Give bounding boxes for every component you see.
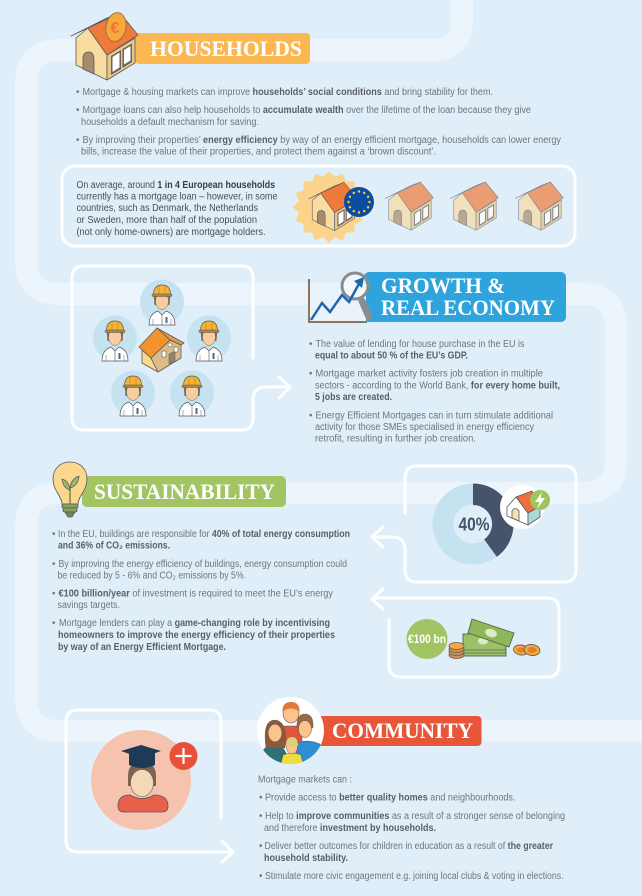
text block: community bullets: Help to improve communities as a result of a stronger sense of belonging [265,811,565,822]
text block: households bullets: • [76,135,80,146]
arrow: education panel to text [222,841,233,862]
icon: plus badge [170,742,198,770]
text block: households bullets: bills, increase the value of their properties, and protect them against a ‘brown discount’. [81,146,436,158]
text block: European mortgage share [76,180,278,238]
text block: European mortgage share: or Sweden, more than half of the population [76,215,257,226]
arrow: 40 percent panel to text [372,527,383,547]
heading: community: COMMUNITY [332,718,473,743]
text block: sustainability bullets [52,529,350,653]
icon: highlighted house with EU flag [293,171,374,243]
text block: growth bullets: The value of lending for house purchase in the EU is [316,339,525,350]
text block: community bullets: • [259,841,263,852]
icon: banknotes [463,619,514,656]
text block: growth bullets: 5 jobs are created. [315,392,392,403]
chart: donut 40 percent: 40% [458,514,490,534]
text block: community bullets: • [259,871,263,882]
text block: European mortgage share: currently has a mortgage loan – however, in some [76,192,278,202]
panel: 40 percent energy [372,466,576,582]
text block: community bullets: Provide access to better quality homes and neighbourhoods. [265,792,516,804]
icon: graduate [91,730,191,830]
text block: community bullets: • [259,811,263,822]
text block: growth bullets: Mortgage market activity fosters job creation in multiple [316,368,544,380]
chart: donut 40 percent [443,483,514,557]
text block: community bullets [258,774,565,882]
text block: sustainability bullets: By improving the energy efficiency of buildings, energy consumption could [58,559,347,570]
text block: sustainability bullets: be reduced by 5 - 6% and CO₂ emissions by 5%. [58,570,246,582]
text block: households bullets: By improving their properties’ energy efficiency by way of an energy efficient mortgage, households can lower energy [82,135,561,146]
text block: community bullets: Mortgage markets can : [258,774,352,786]
icon: light bulb with sprout [53,462,87,517]
text block: sustainability bullets: In the EU, buildings are responsible for 40% of total energy consumption [58,529,350,540]
callout: 100 bn [406,619,448,659]
text block: sustainability bullets: €100 billion/year of investment is required to meet the EU’s energy [58,588,333,600]
panel: workers around a house [72,266,290,430]
icon: house with euro coin: € [110,20,120,37]
icon: efficient house with energy badge [500,485,550,529]
text block: households bullets: Mortgage loans can also help households to accumulate wealth over the lifetime of the loan because they give [82,105,532,116]
heading: sustainability: SUSTAINABILITY [94,479,275,504]
text block: growth bullets: equal to about 50 % of the EU’s GDP. [315,350,468,362]
icon: central house [139,328,184,372]
text block: households bullets: households a default mechanism for saving. [81,117,259,128]
text block: community bullets: household stability. [264,853,348,864]
text block: community bullets: Stimulate more civic engagement e.g. joining local clubs & voting in elections. [265,871,564,882]
text block: European mortgage share: (not only home-owners) are mortgage holders. [76,227,266,238]
panel: 1 in 4 households [62,166,575,246]
text block: households bullets: • [76,105,80,116]
arrow: growth panel to text [279,377,290,398]
text block: community bullets: Deliver better outcomes for children in education as a result of the greater [264,841,553,852]
icon: family [256,697,324,768]
text block: community bullets: and therefore investment by households. [264,823,436,834]
icon: coin stack [449,642,464,658]
icon: worker left [93,316,137,361]
heading: households: HOUSEHOLDS [150,36,302,61]
panel: education [66,710,233,862]
text block: growth bullets: retrofit, resulting in further job creation. [315,434,476,444]
icon: house with euro coin [71,11,138,80]
text block: growth bullets [309,339,560,444]
text block: European mortgage share: countries, such as Denmark, the Netherlands [76,203,258,214]
text block: sustainability bullets: • [52,559,56,570]
text block: sustainability bullets: Mortgage lenders can play a game-changing role by incentivising [59,618,330,629]
panel: 100 billion investment [372,589,559,677]
icon: worker right [187,316,231,361]
callout: 100 bn: €100 bn [408,634,446,646]
text block: households bullets [76,87,561,158]
text block: European mortgage share: On average, around 1 in 4 European households [76,180,275,191]
heading: growth and real economy [364,272,566,322]
text block: growth bullets: sectors - according to the World Bank, for every home built, [315,380,560,392]
icon: loose coins [513,643,541,657]
text block: sustainability bullets: • [52,618,56,629]
text block: sustainability bullets: and 36% of CO₂ emissions. [58,540,170,552]
text block: growth bullets: • [309,368,313,380]
text block: growth bullets: activity for those SMEs specialised in energy efficiency [315,422,534,433]
text block: sustainability bullets: by way of an Energy Efficient Mortgage. [58,642,226,653]
heading: growth and real economy: REAL ECONOMY [381,295,555,320]
icon: worker bottom left [111,370,155,416]
heading: growth and real economy: GROWTH & [381,273,505,298]
text block: sustainability bullets: • [52,529,56,540]
arrow: investment panel to text [372,589,383,609]
winding road [26,0,642,731]
text block: households bullets: • [76,87,80,98]
text block: growth bullets: Energy Efficient Mortgages can in turn stimulate additional [316,410,553,422]
icon: three faded houses [385,182,563,230]
text block: sustainability bullets: • [52,588,56,600]
text block: growth bullets: • [309,339,313,350]
icon: rising chart with magnifier [309,273,369,322]
text block: growth bullets: • [309,410,313,422]
text block: community bullets: • [259,792,263,804]
text block: sustainability bullets: savings targets. [58,600,120,611]
icon: worker top [140,280,184,325]
icon: worker bottom right [170,370,214,416]
text block: sustainability bullets: homeowners to improve the energy efficiency of their properties [58,630,336,641]
text block: households bullets: Mortgage & housing markets can improve households’ social conditions and bring stability for them. [82,87,493,98]
